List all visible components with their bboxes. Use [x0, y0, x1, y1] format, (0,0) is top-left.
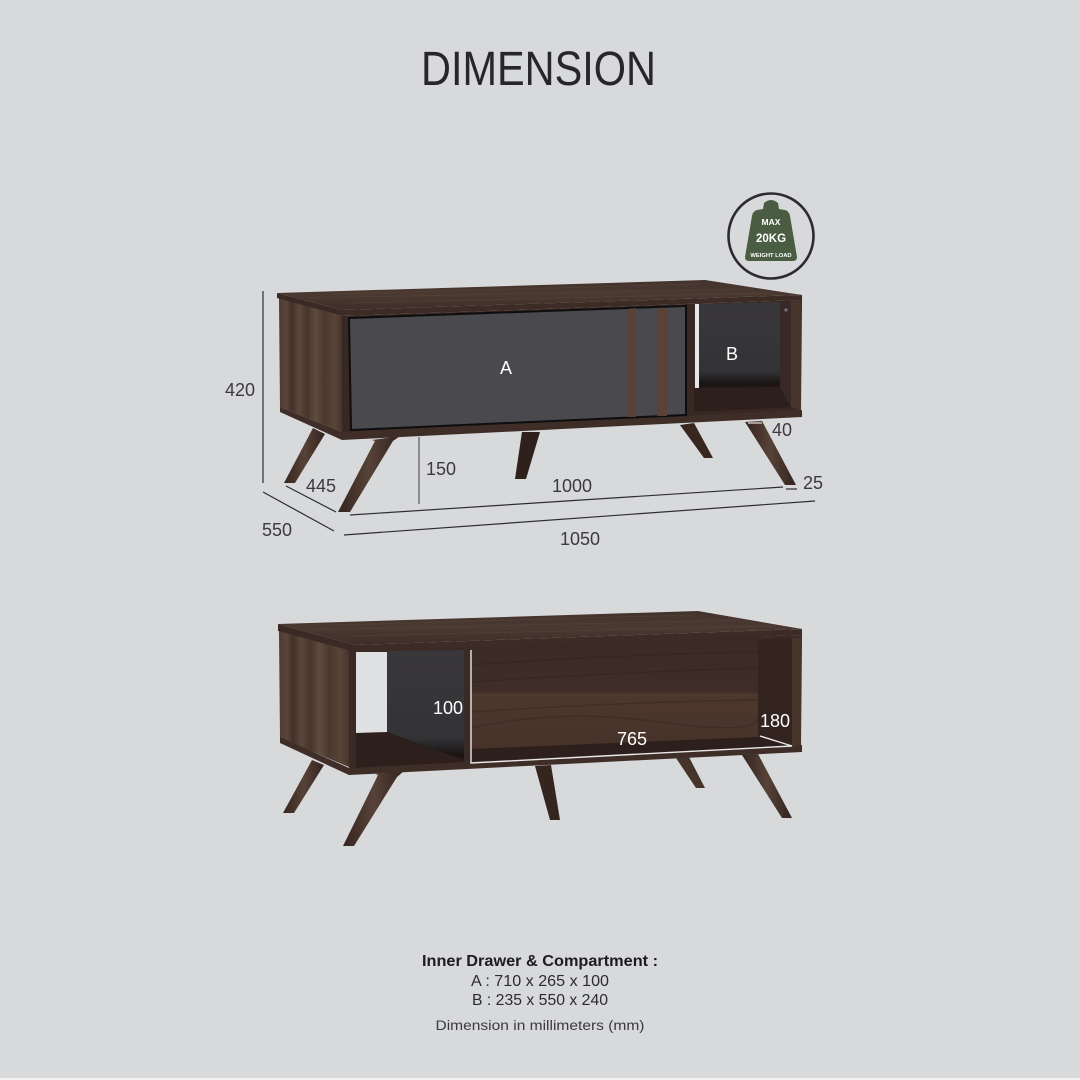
dimension labels: front view: 445 [306, 476, 336, 496]
dimension labels: front view: 150 [426, 459, 456, 479]
icon: weight load badge [728, 194, 814, 278]
dimension labels: front view: 1050 [560, 529, 600, 549]
dimension labels: front view: A [500, 358, 512, 378]
dimension labels: back view [433, 698, 790, 749]
furniture: front view table [277, 280, 802, 512]
dimension labels: front view: 420 [225, 380, 255, 400]
legs: front view [284, 421, 796, 512]
dimension labels: back view: 100 [433, 698, 463, 718]
dimension labels: front view: 25 [803, 473, 823, 493]
left opening [356, 650, 464, 768]
drawer A [348, 305, 687, 431]
dimension labels: front view: 1000 [552, 476, 592, 496]
dimension labels: front view [225, 344, 823, 549]
furniture: back view table [278, 611, 802, 846]
text block: inner drawer and compartment: Dimension in millimeters (mm) [436, 1018, 644, 1033]
left side panel [279, 631, 349, 767]
icon: weight load badge: 20KG [756, 233, 786, 245]
top surface [278, 611, 802, 645]
title: DIMENSION [421, 43, 656, 96]
dimension lines: front view [263, 291, 815, 535]
compartment B [694, 301, 801, 412]
back wood panel [471, 640, 758, 749]
dimension labels: back view: 765 [617, 729, 647, 749]
text block: inner drawer and compartment: Inner Drawer & Compartment : [422, 953, 658, 970]
text block: inner drawer and compartment [422, 953, 658, 1033]
left side panel [279, 298, 342, 432]
left rim [280, 407, 802, 440]
front carcass [342, 300, 802, 433]
white measure lines [471, 650, 792, 763]
bottom rim [280, 737, 802, 775]
dimension labels: back view: 180 [760, 711, 790, 731]
legs: back view [283, 754, 792, 846]
text block: inner drawer and compartment: A : 710 x 265 x 100 [471, 973, 609, 990]
top surface [277, 280, 802, 310]
dimension labels: front view: 40 [772, 420, 792, 440]
carcass [349, 635, 802, 769]
icon: weight load badge: WEIGHT LOAD [750, 253, 792, 259]
icon: weight load badge: MAX [762, 217, 781, 227]
dimension labels: front view: 550 [262, 520, 292, 540]
dimension labels: front view: B [726, 344, 738, 364]
text block: inner drawer and compartment: B : 235 x 550 x 240 [472, 992, 608, 1009]
